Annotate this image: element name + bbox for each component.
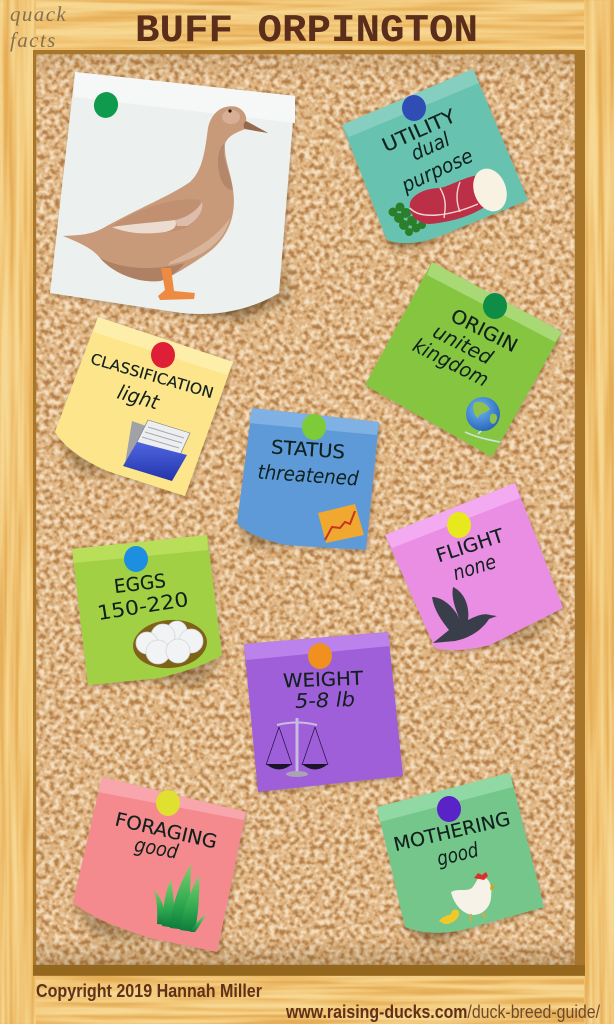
icon: grass tuft: [151, 864, 206, 932]
icon: nest of eggs: [131, 617, 209, 671]
note paper: [55, 317, 233, 496]
note: utility: [342, 69, 528, 250]
note: foraging: [70, 777, 246, 952]
title: BUFF ORPINGTON: [135, 9, 478, 53]
heading: EGGS: [113, 570, 167, 598]
pin: green: [91, 89, 121, 121]
icon: balance scale: [266, 718, 328, 777]
note: mothering: [377, 773, 544, 942]
note paper: [365, 262, 562, 457]
note paper: [50, 72, 295, 314]
value: good: [133, 832, 180, 864]
note: classification: [55, 317, 233, 496]
pin: light green: [302, 414, 326, 440]
note band: [377, 773, 513, 822]
pin: yellow: [156, 790, 180, 816]
copyright: Copyright 2019 Hannah Miller: [36, 981, 262, 1001]
quack facts label: quack: [10, 2, 67, 26]
heading: CLASSIFICATION: [88, 350, 216, 402]
pin: purple: [437, 796, 461, 822]
heading: MOTHERING: [392, 808, 512, 856]
value: threatened: [257, 460, 360, 491]
note band: [93, 317, 233, 375]
heading: ORIGIN: [447, 305, 521, 357]
icon: meat, egg and parsley: [388, 164, 513, 236]
value: none: [450, 549, 499, 585]
note band: [342, 69, 479, 137]
quack facts label: [10, 2, 67, 52]
pin: blue: [124, 546, 148, 572]
value: dual purpose: dual: [407, 127, 454, 165]
note paper: [73, 777, 246, 952]
pin: orange: [308, 643, 332, 669]
value: 5-8 lb: [295, 687, 355, 713]
pin: red: [151, 342, 175, 368]
icon: flying duck: [432, 587, 497, 643]
value: light: [115, 380, 163, 415]
icon: buff duck: [63, 106, 268, 300]
icon: globe: [465, 397, 500, 442]
heading: UTILITY: [379, 105, 459, 157]
value: united kingdom: kingdom: [409, 333, 493, 392]
note paper: [342, 69, 528, 243]
pin: green: [483, 293, 507, 319]
value: dual purpose: purpose: [397, 143, 477, 198]
note band: [74, 72, 295, 123]
note band: [427, 262, 562, 342]
note: eggs: [72, 535, 222, 685]
value: 150-220: [96, 587, 190, 625]
note: weight: [244, 632, 403, 792]
note: duck photo: [50, 72, 295, 322]
note: origin: [365, 262, 562, 457]
heading: STATUS: [270, 436, 346, 464]
note band: [72, 535, 208, 563]
icon: orange chart: [318, 504, 364, 543]
quack facts label: facts: [10, 28, 57, 52]
note band: [244, 632, 390, 660]
website url: www.raising-ducks.com/duck-breed-guide/: [285, 1002, 600, 1022]
note: status: [237, 408, 379, 550]
heading: FORAGING: [113, 809, 219, 853]
note band: [98, 777, 246, 820]
note: flight: [385, 483, 563, 650]
note band: [385, 483, 520, 548]
note paper: [385, 483, 563, 650]
heading: WEIGHT: [283, 668, 364, 692]
note band: [249, 408, 379, 435]
pin: yellow: [447, 512, 471, 538]
icon: hen and chick: [439, 872, 495, 924]
note paper: [377, 773, 544, 933]
value: good: [434, 837, 481, 871]
pin: blue: [402, 95, 426, 121]
heading: FLIGHT: [433, 525, 507, 567]
value: united kingdom: united: [429, 319, 497, 370]
note paper: [244, 632, 403, 792]
icon: folder: [123, 420, 190, 481]
note paper: [237, 408, 379, 550]
note paper: [72, 535, 222, 685]
